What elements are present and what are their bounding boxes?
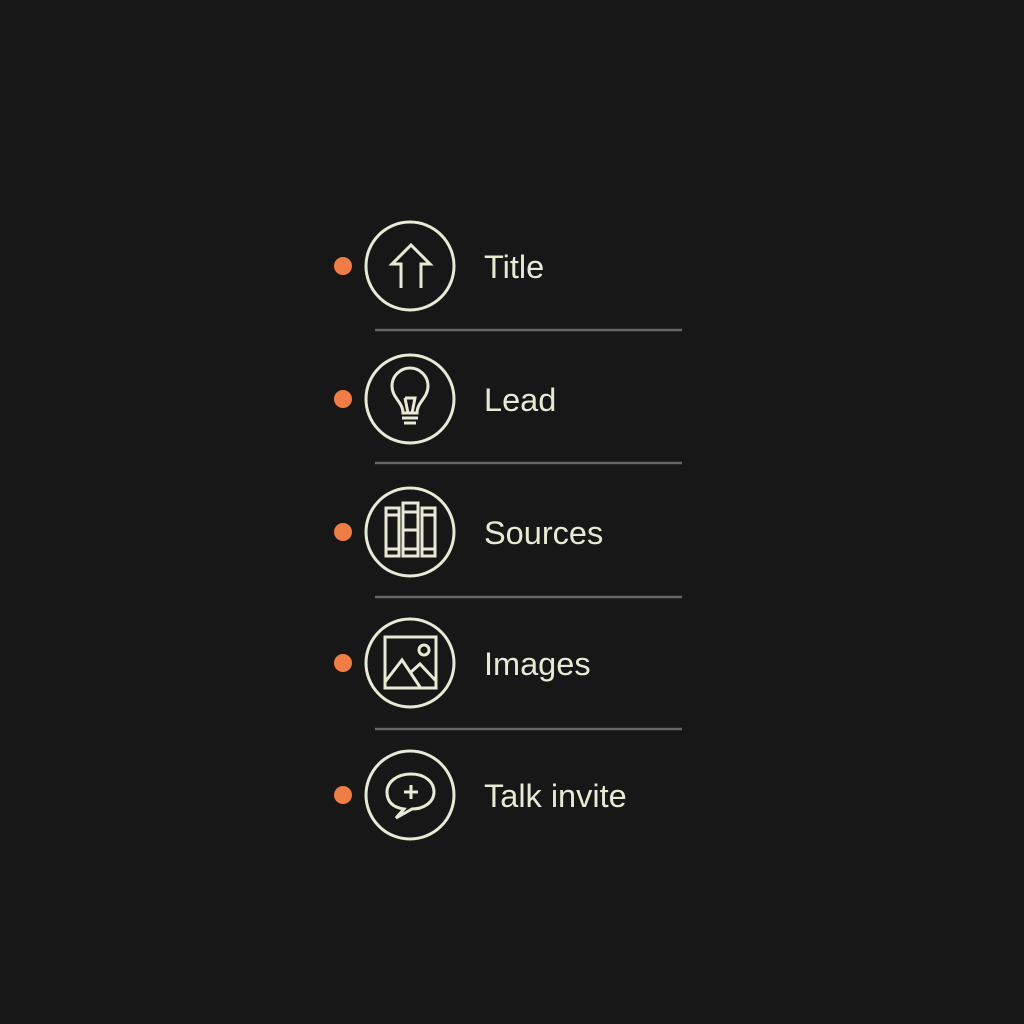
bullet: Images [334, 654, 352, 672]
icon: speech bubble plus [366, 751, 454, 839]
row: Talk invite [334, 751, 627, 839]
bullet: Title [334, 257, 352, 275]
label: Sources: Sources [484, 515, 603, 551]
row: Lead [334, 355, 556, 443]
icon: books [366, 488, 454, 576]
icon: light bulb [366, 355, 454, 443]
row: Title [334, 222, 544, 310]
row: Sources [334, 488, 603, 576]
icon: picture [366, 619, 454, 707]
label: Title: Title [484, 249, 544, 285]
label: Lead: Lead [484, 382, 556, 418]
label: Talk invite: Talk invite [484, 778, 627, 814]
label: Images: Images [484, 646, 591, 682]
bullet: Talk invite [334, 786, 352, 804]
row: Images [334, 619, 591, 707]
icon: up arrow [366, 222, 454, 310]
bullet: Lead [334, 390, 352, 408]
bullet: Sources [334, 523, 352, 541]
